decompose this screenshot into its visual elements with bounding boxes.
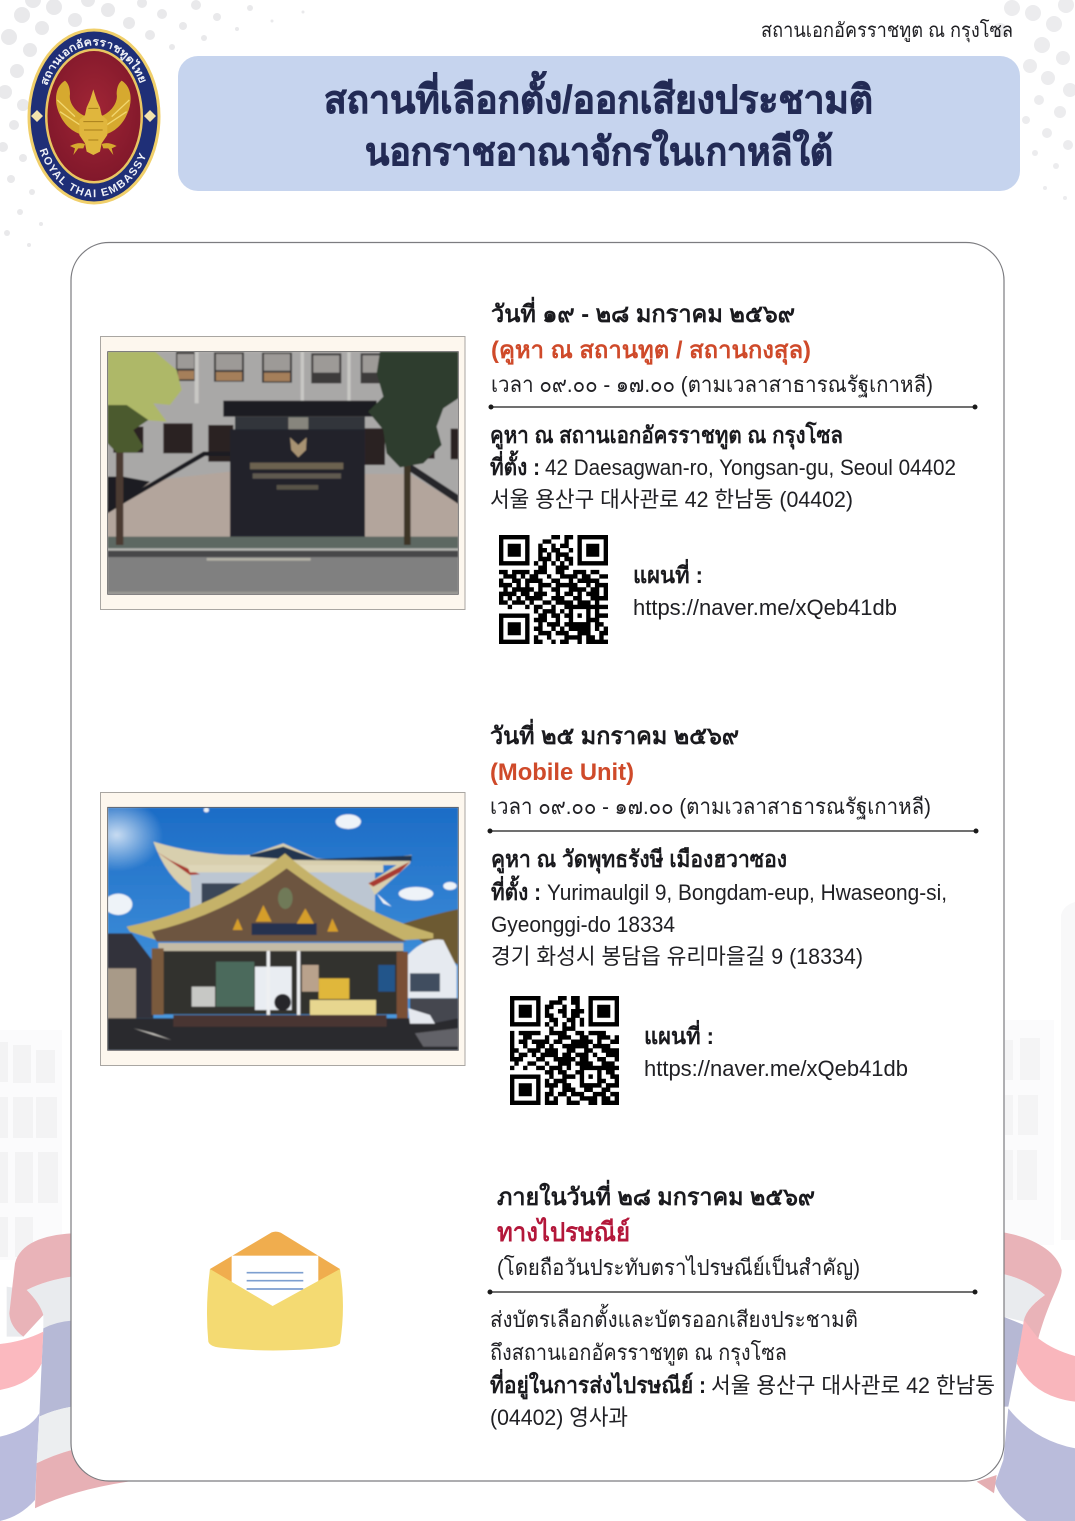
section 3: note: (โดยถือวันประทับตราไปรษณีย์เป็นสำคัญ) — [497, 1253, 860, 1280]
section 1: Korean address: 서울 용산구 대사관로 42 한남동 (04402) — [490, 487, 853, 512]
section 3: postal address: ที่อยู่ในการส่งไปรษณีย์ : — [490, 1368, 706, 1400]
section 2: address — [491, 875, 947, 937]
photo: Royal Thai Embassy Seoul — [100, 336, 465, 610]
title banner — [178, 56, 1020, 191]
section 3: date heading: ภายในวันที่ ๒๘ มกราคม ๒๕๖๙ — [497, 1179, 815, 1211]
icon: Royal Thai Embassy emblem: สถานเอกอัครราชทูตไทย — [42, 38, 146, 85]
section 1: channel: (คูหา ณ สถานทูต / สถานกงสุล) — [491, 337, 811, 366]
section 1: map URL: https://naver.me/xQeb41db — [633, 595, 897, 620]
section 2: address: Yurimaulgil 9, Bongdam-eup, Hwaseong-si, — [547, 880, 947, 905]
section 2: address: Gyeonggi-do 18334 — [491, 912, 675, 937]
section 3: instructions: ถึงสถานเอกอัครราชทูต ณ กรุงโซล — [490, 1340, 787, 1366]
background: flag ribbon left — [0, 1233, 128, 1521]
section 2: date heading: วันที่ ๒๕ มกราคม ๒๕๖๙ — [490, 718, 739, 750]
section 1: map label: แผนที่ : — [633, 558, 703, 588]
section 2: address: ที่ตั้ง : — [491, 875, 541, 905]
section 1: address: ที่ตั้ง : — [490, 450, 540, 480]
background: dot pattern top right — [993, 0, 1075, 200]
section 3: instructions: ส่งบัตรเลือกตั้งและบัตรออกเสียงประชามติ — [490, 1304, 858, 1332]
icon: Royal Thai Embassy emblem: ROYAL THAI EMBASSY — [40, 148, 146, 198]
section 2: channel: (Mobile Unit) — [490, 759, 634, 786]
section 1: venue: คูหา ณ สถานเอกอัครราชทูต ณ กรุงโซล — [490, 421, 843, 450]
title line 1: สถานที่เลือกตั้ง/ออกเสียงประชามติ — [324, 71, 873, 122]
header: embassy name top right: สถานเอกอัครราชทูต ณ กรุงโซล — [761, 19, 1013, 43]
background: dot pattern top left — [0, 0, 304, 247]
title line 2: นอกราชอาณาจักรในเกาหลีใต้ — [365, 129, 833, 174]
section 2: map URL: https://naver.me/xQeb41db — [644, 1056, 908, 1081]
section 2: venue: คูหา ณ วัดพุทธรังษี เมืองฮวาซอง — [491, 846, 787, 874]
section 1: time: เวลา ๐๙.๐๐ - ๑๗.๐๐ (ตามเวลาสาธารณรัฐเกาหลี) — [491, 372, 933, 398]
section 3: postal address: 서울 용산구 대사관로 42 한남동 — [711, 1373, 995, 1398]
background: flag ribbon right — [977, 1232, 1075, 1521]
icon: mail envelope — [207, 1232, 343, 1350]
main white card — [71, 242, 1004, 1481]
QR code 1 — [499, 535, 608, 644]
section 2: time: เวลา ๐๙.๐๐ - ๑๗.๐๐ (ตามเวลาสาธารณรัฐเกาหลี) — [490, 794, 931, 820]
photo: Wat Buddharangsi Hwaseong — [70, 792, 465, 1066]
section 3: postal address — [490, 1368, 995, 1430]
QR code 2 — [510, 996, 619, 1105]
icon: garuda — [56, 81, 131, 155]
background: faint buildings — [0, 902, 1075, 1260]
section 1: address: 42 Daesagwan-ro, Yongsan-gu, Seoul 04402 — [545, 455, 956, 480]
icon: Royal Thai Embassy emblem — [28, 28, 160, 204]
section 3: postal address: (04402) 영사과 — [490, 1405, 628, 1430]
section 3: channel: ทางไปรษณีย์ — [497, 1216, 630, 1247]
section 2: Korean address: 경기 화성시 봉담읍 유리마을길 9 (18334) — [491, 944, 863, 969]
section 2: map label: แผนที่ : — [644, 1019, 714, 1049]
section 1: date heading: วันที่ ๑๙ - ๒๘ มกราคม ๒๕๖๙ — [491, 296, 795, 328]
section 3: instructions — [490, 1304, 858, 1366]
